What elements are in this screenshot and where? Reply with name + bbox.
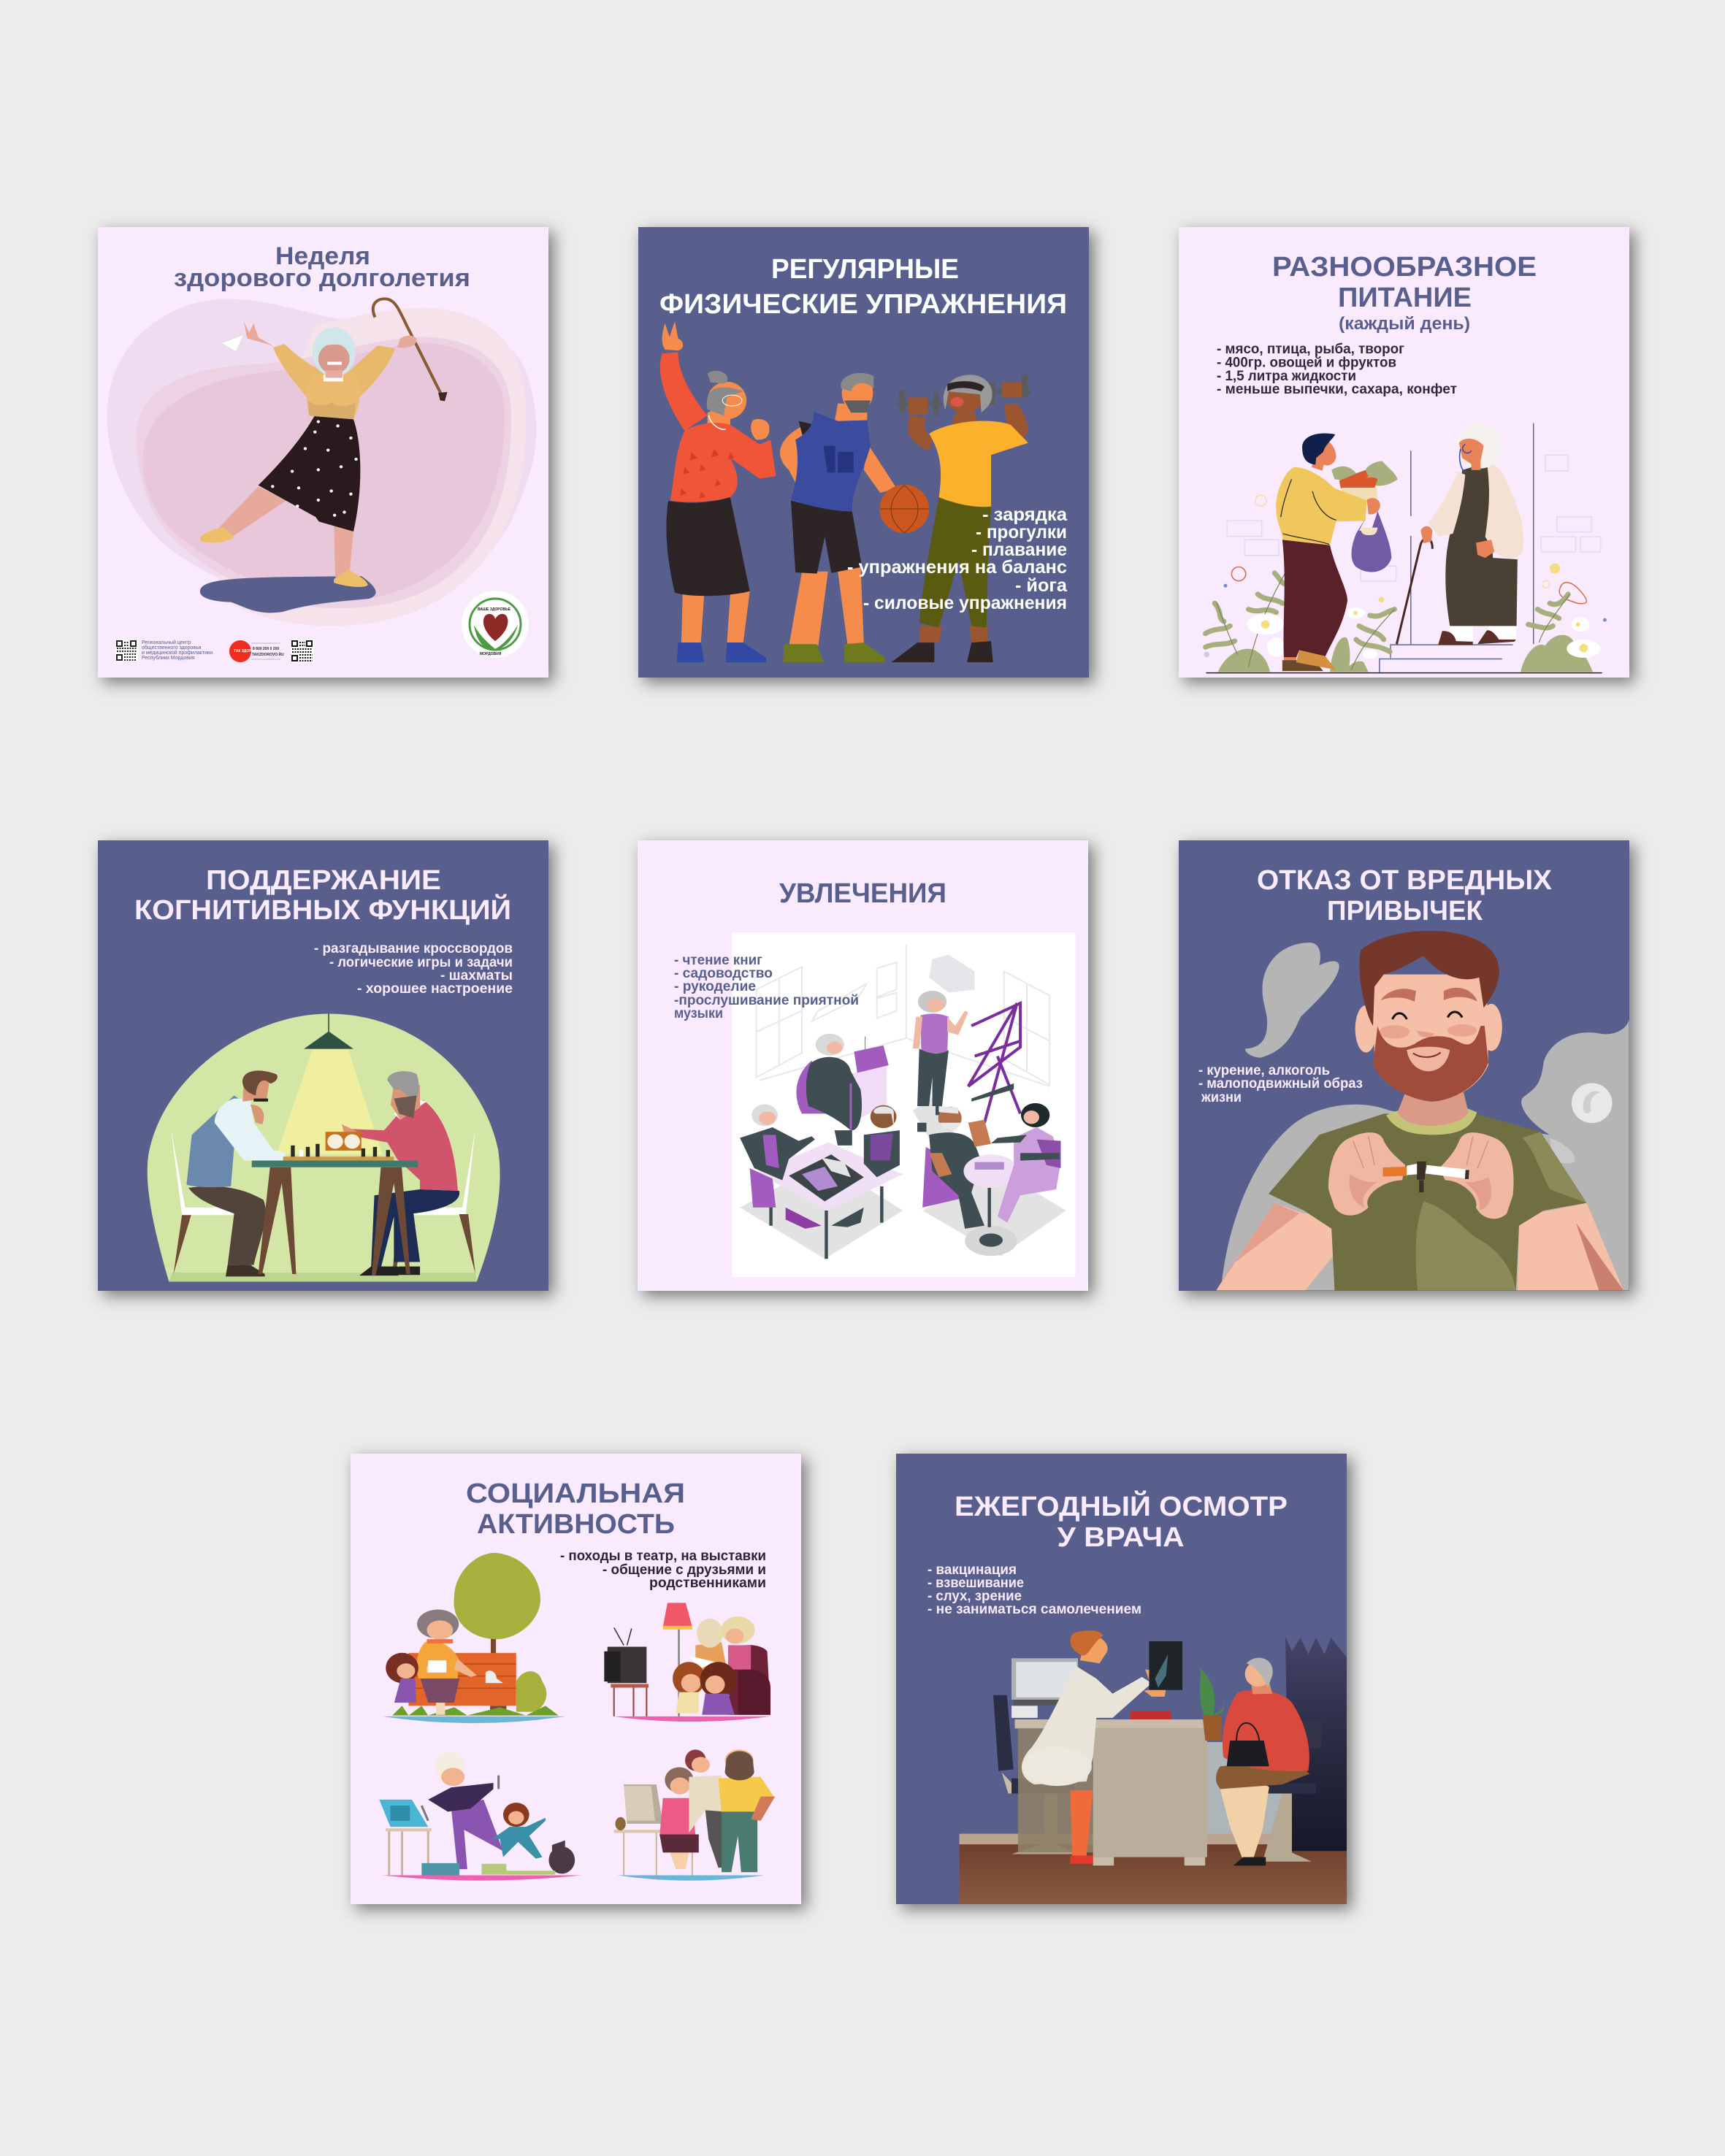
title <box>174 242 470 292</box>
title: ПОДДЕРЖАНИЕ <box>206 865 441 896</box>
illustration: doctor and patient <box>960 1630 1347 1903</box>
doctor's chair <box>993 1695 1014 1771</box>
nose <box>1416 1030 1434 1038</box>
logo: heart in hands <box>462 591 529 658</box>
face <box>1373 975 1488 1102</box>
chess clock <box>326 1132 362 1151</box>
list: bad habits: жизни <box>1201 1090 1242 1105</box>
wall details <box>1227 455 1601 581</box>
list: social activities: родственниками <box>649 1576 766 1591</box>
logo: heart in hands: МОРДОВИЯ <box>480 652 502 656</box>
eyes <box>1393 1012 1462 1019</box>
title <box>466 1478 685 1540</box>
doctor <box>1022 1630 1171 1864</box>
footer: QR codes and contact: ТАК ЗДОРОВО <box>234 649 260 653</box>
torso <box>307 375 359 419</box>
hair and face <box>313 327 356 377</box>
man in blue jersey <box>780 373 897 662</box>
title: ОТКАЗ ОТ ВРЕДНЫХ <box>1257 865 1553 896</box>
list: exercise types: - прогулки <box>976 522 1067 542</box>
scene: family at the computer <box>614 1749 775 1881</box>
footer: QR codes and contact <box>115 640 314 663</box>
cane <box>373 299 443 397</box>
panel: Разнообразное питание <box>1179 227 1629 678</box>
list: cognitive activities <box>314 941 513 997</box>
lamp <box>328 1014 329 1032</box>
list: exercise types: - йога <box>1015 575 1068 596</box>
list: checkup items: - слух, зрение <box>927 1589 1022 1604</box>
elderly woman <box>1420 423 1523 645</box>
board <box>283 1156 394 1161</box>
x-ray film <box>1149 1641 1182 1690</box>
list: cognitive activities: - разгадывание кроссвордов <box>314 941 513 956</box>
list: hobbies: - садоводство <box>674 966 773 981</box>
list: hobbies: -прослушивание приятной <box>674 993 859 1008</box>
footer: QR codes and contact: и медицинской профилактики <box>142 650 213 656</box>
list: social activities: - общение с друзьями и <box>603 1562 766 1578</box>
list: food recommendations: - мясо, птица, рыба, творог <box>1217 342 1404 357</box>
list: bad habits <box>1198 1063 1363 1105</box>
list: cognitive activities: - шахматы <box>440 968 513 983</box>
title <box>1272 252 1537 334</box>
green dome <box>148 1014 500 1281</box>
chairs <box>171 1129 475 1215</box>
patient chair <box>1295 1719 1321 1748</box>
list: bad habits: - малоподвижный образ <box>1198 1076 1363 1092</box>
hair <box>1359 931 1499 1026</box>
hands <box>244 322 417 348</box>
title <box>659 254 1067 320</box>
list: checkup items: - вакцинация <box>927 1562 1017 1578</box>
scene: grandmother on bench <box>383 1553 565 1723</box>
list: food recommendations: - 400гр. овощей и фруктов <box>1217 355 1396 371</box>
title <box>1257 865 1553 927</box>
panel: Ежегодный осмотр у врача <box>896 1454 1347 1904</box>
title: УВЛЕЧЕНИЯ <box>779 878 946 909</box>
title: ФИЗИЧЕСКИЕ УПРАЖНЕНИЯ <box>659 289 1067 320</box>
eyebrows <box>1381 988 1477 1002</box>
white illustration background <box>732 932 1075 1277</box>
hands <box>1328 1132 1405 1216</box>
list: cognitive activities: - хорошее настроение <box>357 981 513 997</box>
title: ПРИВЫЧЕК <box>1327 896 1483 927</box>
neck and collar <box>1386 1108 1477 1135</box>
list: social activities <box>560 1549 766 1591</box>
room frames <box>757 944 1049 1086</box>
curtain <box>1285 1636 1347 1851</box>
title: СОЦИАЛЬНАЯ <box>466 1478 685 1509</box>
panel: Регулярные физические упражнения <box>638 227 1089 678</box>
logo: heart in hands: ВАШЕ ЗДОРОВЬЕ <box>478 607 511 612</box>
floor and wall <box>1204 1742 1285 1842</box>
list: food recommendations <box>1217 342 1457 397</box>
list: food recommendations: - 1,5 литра жидкости <box>1217 369 1356 384</box>
list: bad habits: - курение, алкоголь <box>1198 1063 1330 1078</box>
illustration: two men playing chess <box>148 1014 500 1281</box>
panel: Отказ от вредных привычек <box>1179 840 1629 1291</box>
illustration: man breaking a cigarette <box>1216 931 1629 1290</box>
scarf <box>221 334 244 352</box>
panel: Неделя здорового долголетия <box>98 227 548 678</box>
table with chess <box>757 1143 903 1259</box>
list: hobbies: музыки <box>674 1006 723 1021</box>
monitor <box>1011 1658 1078 1700</box>
title <box>134 865 511 926</box>
shirt <box>1269 1113 1587 1290</box>
list: checkup items <box>927 1562 1141 1617</box>
list: food recommendations: - меньше выпечки, сахара, конфет <box>1217 382 1457 397</box>
right chess player <box>831 1105 900 1227</box>
standing woman painting <box>913 991 968 1132</box>
illustration: four family scenes <box>379 1553 775 1881</box>
list: checkup items: - не заниматься самолечением <box>927 1602 1141 1617</box>
list: checkup items: - взвешивание <box>927 1576 1024 1591</box>
legs <box>215 487 353 578</box>
plant <box>1203 1716 1222 1741</box>
patient <box>1216 1658 1309 1865</box>
left chess player <box>740 1104 822 1229</box>
title: Неделя <box>275 242 370 270</box>
woman in red <box>660 321 776 662</box>
title: ЕЖЕГОДНЫЙ ОСМОТР <box>955 1489 1288 1522</box>
panel: Поддержание когнитивных функций <box>98 840 548 1291</box>
man <box>1276 434 1398 671</box>
title: АКТИВНОСТЬ <box>477 1509 675 1540</box>
left man <box>186 1070 286 1276</box>
title: ПИТАНИЕ <box>1338 283 1472 313</box>
footer: QR codes and contact: общественного здоровья <box>142 645 202 651</box>
skirt <box>259 416 360 532</box>
list: exercise types: - силовые упражнения <box>863 593 1067 613</box>
flowers <box>1247 607 1601 659</box>
seated woman with radio <box>796 1034 889 1146</box>
list: hobbies <box>674 953 859 1021</box>
list: cognitive activities: - логические игры и задачи <box>329 955 513 970</box>
sleeves <box>273 344 395 402</box>
ears <box>1355 1005 1377 1053</box>
man in yellow with dumbbells <box>891 375 1030 662</box>
desk <box>1015 1719 1217 1728</box>
panel: Увлечения <box>638 840 1088 1291</box>
round table pair <box>922 1103 1060 1247</box>
arms <box>1216 1203 1350 1290</box>
easel <box>968 1003 1020 1123</box>
panel: Социальная активность <box>351 1454 801 1904</box>
footer: QR codes and contact: 8 800 200 0 200 <box>253 647 279 651</box>
list: exercise types: - зарядка <box>982 505 1068 525</box>
title: РЕГУЛЯРНЫЕ <box>771 254 959 285</box>
footer: QR codes and contact: TAKZDOROVO.RU <box>252 653 284 657</box>
list: exercise types <box>847 505 1068 613</box>
ground line <box>1206 672 1602 674</box>
list: exercise types: - плавание <box>971 540 1067 560</box>
footer: QR codes and contact: Республики Мордовия <box>142 655 195 661</box>
right man <box>342 1071 459 1275</box>
basketball <box>879 485 929 533</box>
red box <box>1131 1711 1171 1719</box>
background blobs and dancing woman <box>107 299 537 626</box>
table <box>252 1161 418 1167</box>
floor shadows <box>740 1095 1066 1259</box>
title: РАЗНООБРАЗНОЕ <box>1272 252 1537 283</box>
title: (каждый день) <box>1339 314 1470 334</box>
plants <box>1217 635 1593 672</box>
list: hobbies: - рукоделие <box>674 979 756 994</box>
list: exercise types: - упражнения на баланс <box>847 557 1067 578</box>
footer: QR codes and contact: Региональный центр <box>142 640 191 645</box>
illustration: isometric hobby room <box>740 944 1066 1259</box>
scene: family at TV <box>604 1603 770 1722</box>
title <box>955 1489 1288 1553</box>
smoke <box>1221 1020 1629 1290</box>
broken cigarette <box>1382 1167 1408 1177</box>
title: КОГНИТИВНЫХ ФУНКЦИЙ <box>134 893 511 926</box>
title: У ВРАЧА <box>1057 1522 1185 1553</box>
beard <box>1373 1026 1488 1102</box>
cane <box>1396 538 1432 644</box>
platform <box>200 576 376 613</box>
light cone <box>277 1049 382 1154</box>
illustration: man bringing food to elderly woman <box>1204 423 1607 673</box>
list: hobbies: - чтение книг <box>674 953 762 968</box>
chess pieces <box>291 1144 390 1159</box>
illustration: three exercising seniors <box>660 321 1030 662</box>
title: здорового долголетия <box>174 264 470 292</box>
scene: exercise with granddaughter <box>379 1751 581 1881</box>
bubble <box>1572 1083 1612 1123</box>
list: social activities: - походы в театр, на выставки <box>560 1549 766 1564</box>
